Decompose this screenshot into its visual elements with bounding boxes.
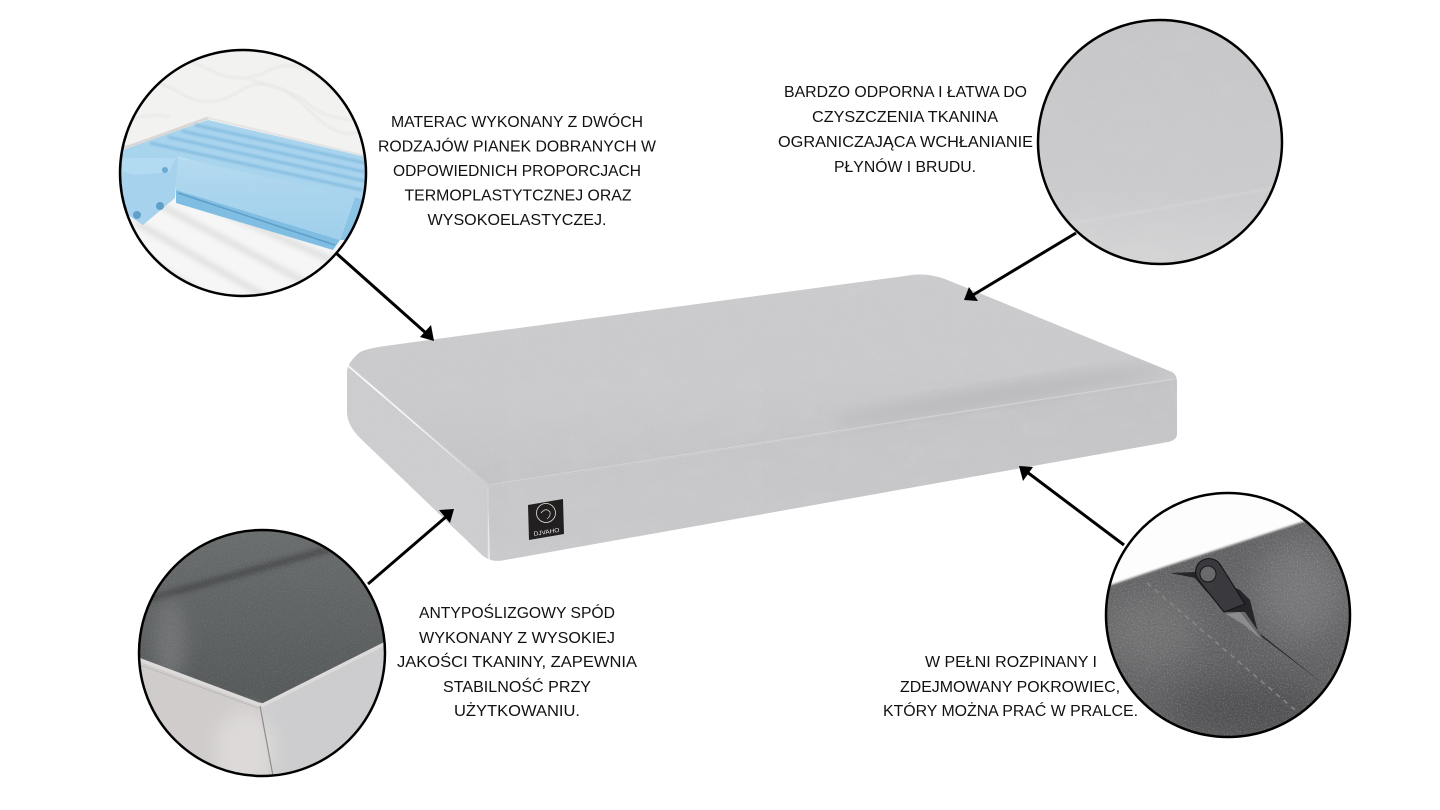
white background wedge [1110, 494, 1306, 587]
text: underside description: UŻYTKOWANIU. [454, 702, 580, 720]
text: fabric description: CZYSZCZENIA TKANINA [812, 109, 999, 126]
text: foam description: ODPOWIEDNICH PROPORCJACH [393, 163, 641, 180]
mattress left side [347, 367, 488, 559]
circle: fabric close-up [1035, 18, 1285, 268]
text: fabric description: BARDZO ODPORNA I ŁATWA DO [784, 84, 1027, 101]
zipper pull [1196, 559, 1245, 612]
text: zipper description: ZDEJMOWANY POKROWIEC, [900, 679, 1120, 696]
text: foam description [378, 114, 656, 229]
circle: anti-slip underside [135, 525, 390, 790]
foam corner block [121, 157, 178, 225]
circle: foam layers [115, 45, 371, 305]
foam front face [176, 157, 355, 240]
text: foam description: WYSOKOELASTYCZEJ. [428, 212, 606, 229]
text: zipper description: KTÓRY MOŻNA PRAĆ W PRALCE. [883, 702, 1138, 720]
text: zipper description: W PEŁNI ROZPINANY I [925, 654, 1097, 671]
mattress product photo [340, 265, 1185, 570]
text: underside description: JAKOŚCI TKANINY, ZAPEWNIA [397, 653, 638, 671]
zipper slit [1170, 572, 1325, 685]
white slats [115, 190, 371, 305]
text: underside description: WYKONANY Z WYSOKIEJ [419, 630, 615, 647]
text: fabric description [778, 84, 1033, 176]
circle: zipper close-up [1100, 488, 1356, 742]
text: foam description: TERMOPLASTYTCZNEJ ORAZ [404, 188, 632, 204]
light fabric sides [140, 662, 270, 775]
text: foam description: MATERAC WYKONANY Z DWÓCH [391, 114, 643, 131]
text: fabric description: PŁYNÓW I BRUDU. [834, 159, 976, 176]
arrow: zipper circle to mattress [1019, 466, 1124, 545]
foam ribbed top [118, 120, 370, 205]
brand label: DJVAHO [533, 528, 560, 538]
text: fabric description: OGRANICZAJĄCA WCHŁANIANIE [778, 134, 1033, 151]
brand label [528, 499, 564, 540]
text: underside description [397, 604, 638, 720]
arrow: foam circle to mattress [336, 253, 434, 341]
mattress top face [340, 265, 1185, 487]
text: zipper description [883, 654, 1138, 720]
arrow: underside circle to mattress [368, 509, 454, 584]
mattress front side [488, 378, 1185, 570]
text: underside description: ANTYPOŚLIZGOWY SPÓD [419, 604, 615, 622]
text: underside description: STABILNOŚĆ PRZY [443, 678, 591, 696]
arrow: fabric circle to mattress [964, 233, 1076, 301]
text: foam description: RODZAJÓW PIANEK DOBRANYCH W [378, 138, 656, 156]
stitching [1147, 583, 1295, 710]
